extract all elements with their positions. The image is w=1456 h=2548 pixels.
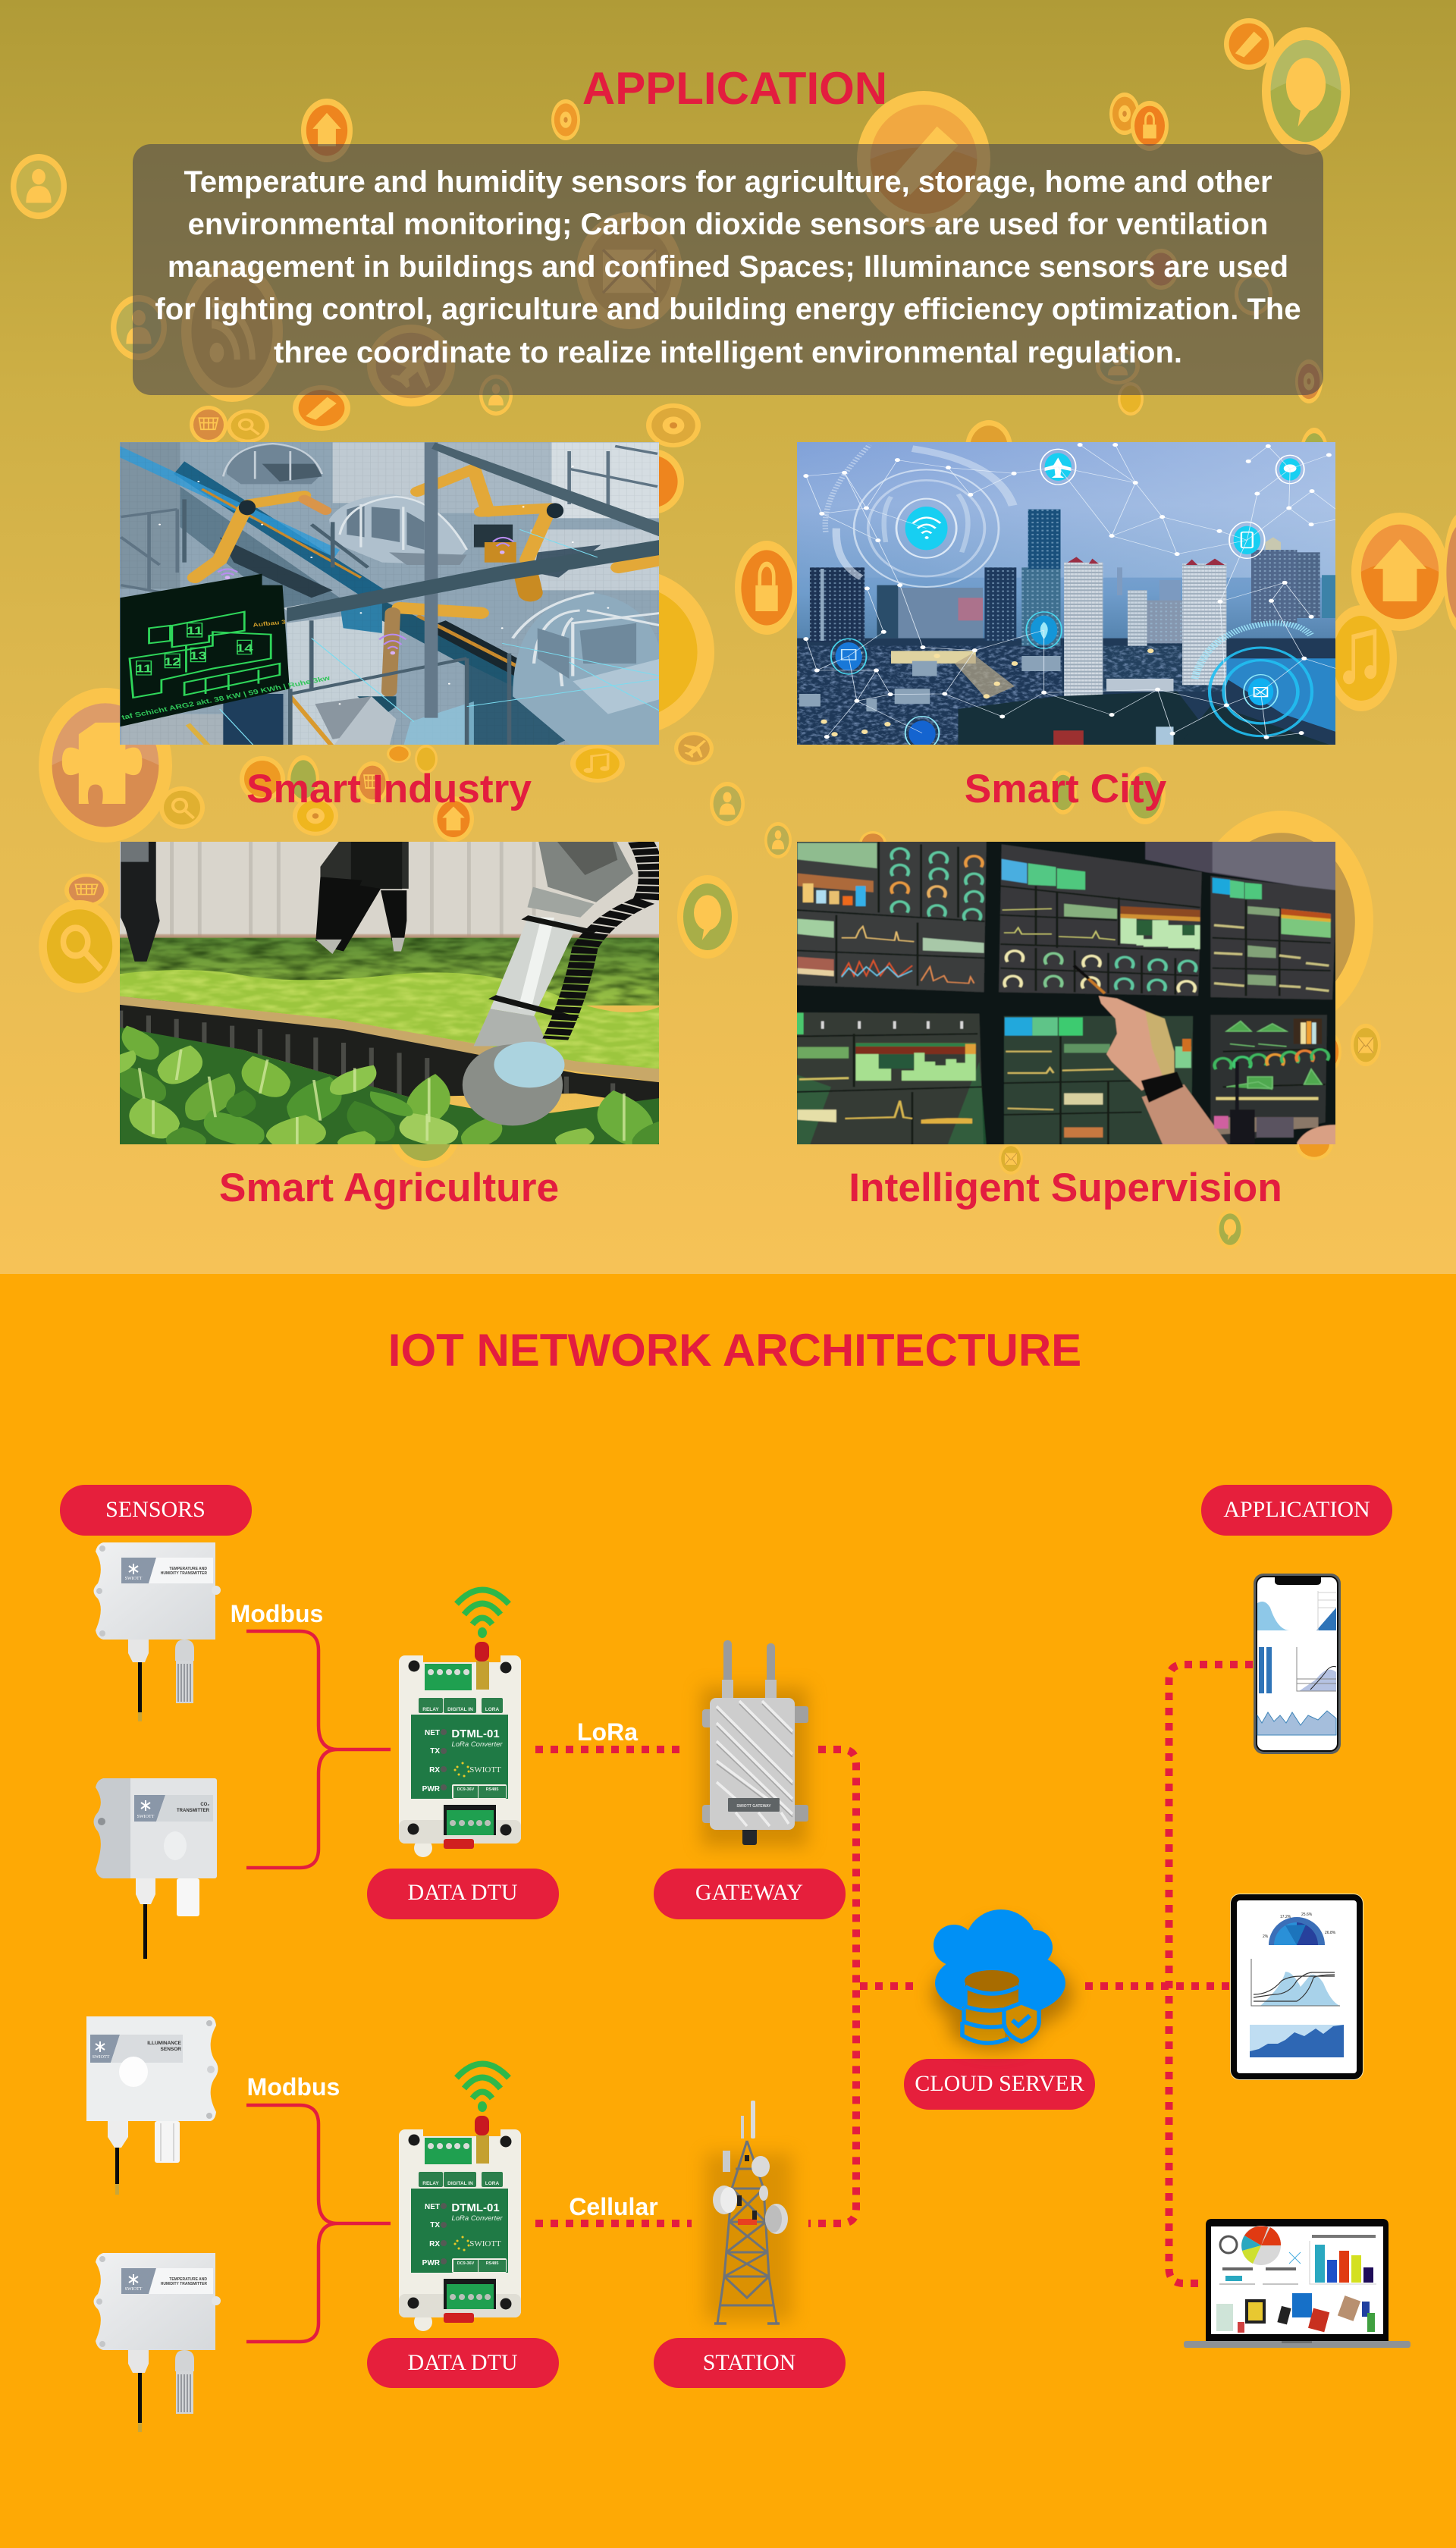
device: tablet dashboard: 26.8% bbox=[1325, 1931, 1336, 1935]
device: DTML-01 DTU top: PWR bbox=[422, 1785, 441, 1793]
device: DTML-01 DTU bottom: RELAY bbox=[422, 2181, 439, 2186]
sensor: temperature and humidity top: TEMPERATURE AND bbox=[169, 1567, 207, 1571]
device: DTML-01 DTU bottom: LORA bbox=[485, 2181, 500, 2186]
device: laptop dashboard bbox=[1184, 2219, 1410, 2348]
sensor: illuminance: ILLUMINANCE bbox=[147, 2041, 182, 2046]
photo: intelligent supervision monitors bbox=[789, 834, 1342, 1149]
device: DTML-01 DTU bottom: DC9-36V bbox=[457, 2261, 475, 2266]
sensor: temperature and humidity bottom: TEMPERATURE AND bbox=[169, 2277, 207, 2282]
label: Smart City: Smart City bbox=[965, 767, 1167, 811]
device: DTML-01 DTU bottom: DTML-01 bbox=[451, 2201, 500, 2214]
photo: smart city network bbox=[789, 436, 1342, 751]
label pill: CLOUD SERVER bbox=[904, 2059, 1095, 2110]
device: DTML-01 DTU top: RX bbox=[429, 1766, 440, 1774]
arrow: gateway and station to cloud bbox=[808, 1749, 913, 2223]
label pill: STATION: STATION bbox=[703, 2350, 795, 2375]
text block: description: Temperature and humidity sensors for agriculture, storage, home and other bbox=[184, 165, 1272, 199]
text block: description: three coordinate to realize intelligent environmental regulation. bbox=[274, 336, 1182, 369]
icon: wifi top bbox=[457, 1589, 509, 1638]
text block: description: environmental monitoring; Carbon dioxide sensors are used for ventilation bbox=[188, 208, 1268, 241]
device: DTML-01 DTU top: SWIOTT bbox=[469, 1765, 501, 1774]
text block: description: management in buildings and confined Spaces; Illuminance sensors are used bbox=[168, 250, 1288, 284]
photo: smart industry factory: taf Schicht ARG2 akt. 38 KW | 59 KWh | Ruhe 3kw bbox=[121, 674, 332, 721]
label pill: SENSORS: SENSORS bbox=[105, 1497, 206, 1522]
device: DTML-01 DTU top: LoRa Converter bbox=[451, 1740, 503, 1749]
label: Smart Industry: Smart Industry bbox=[246, 767, 532, 811]
protocol label: Cellular: Cellular bbox=[569, 2193, 658, 2220]
sensor: CO2 transmitter: SWIOTT bbox=[137, 1815, 155, 1819]
photo: smart industry factory: 14 bbox=[236, 642, 253, 654]
arrow: cloud to applications bbox=[1085, 1665, 1253, 2283]
label pill: APPLICATION: APPLICATION bbox=[1223, 1497, 1370, 1522]
title: IOT NETWORK ARCHITECTURE: IOT NETWORK ARCHITECTURE bbox=[388, 1325, 1081, 1376]
device: DTML-01 DTU bottom: TX bbox=[430, 2221, 440, 2230]
device: DTML-01 DTU bottom: DIGITAL IN bbox=[447, 2181, 473, 2186]
device: DTML-01 DTU bottom bbox=[399, 2116, 521, 2331]
label pill: DATA DTU bottom bbox=[367, 2338, 559, 2388]
background: architecture section bbox=[0, 1274, 1456, 2548]
photo: smart industry factory: Aufbau 3 bbox=[253, 619, 287, 628]
device: DTML-01 DTU bottom: RS485 bbox=[486, 2261, 498, 2266]
label pill: STATION bbox=[654, 2338, 846, 2388]
sensor: illuminance bbox=[86, 2016, 218, 2195]
device: DTML-01 DTU top: NET bbox=[425, 1729, 440, 1737]
photo: smart industry factory: 11 bbox=[136, 662, 152, 675]
photo: smart industry factory: 12 bbox=[164, 655, 181, 668]
device: tablet dashboard: 17.2% bbox=[1280, 1915, 1291, 1919]
label: Intelligent Supervision: Intelligent Supervision bbox=[849, 1166, 1282, 1210]
text block: description: for lighting control, agriculture and building energy efficiency optimization. The bbox=[155, 293, 1301, 326]
device: DTML-01 DTU top: DTML-01 bbox=[451, 1727, 500, 1740]
label pill: APPLICATION bbox=[1201, 1485, 1392, 1536]
device: DTML-01 DTU top bbox=[399, 1642, 521, 1857]
device: tablet dashboard bbox=[1230, 1894, 1363, 2080]
connector: Modbus bracket top bbox=[246, 1631, 391, 1868]
device: DTML-01 DTU top: DC9-36V bbox=[457, 1787, 475, 1792]
sensor: temperature and humidity top: HUMIDITY TRANSMITTER bbox=[161, 1571, 207, 1576]
label: Smart Agriculture: Smart Agriculture bbox=[219, 1166, 559, 1210]
sensor: illuminance: SWIOTT bbox=[93, 2055, 110, 2060]
label pill: DATA DTU top bbox=[367, 1869, 559, 1919]
icon: wifi bottom bbox=[457, 2064, 509, 2112]
photo: smart industry factory bbox=[114, 436, 667, 751]
label pill: CLOUD SERVER: CLOUD SERVER bbox=[915, 2071, 1084, 2096]
device: DTML-01 DTU top: DIGITAL IN bbox=[447, 1707, 473, 1712]
device: DTML-01 DTU bottom: RX bbox=[429, 2240, 440, 2248]
label pill: DATA DTU top: DATA DTU bbox=[407, 1880, 518, 1905]
photo: smart industry factory: 11 bbox=[187, 624, 203, 637]
label pill: GATEWAY: GATEWAY bbox=[695, 1880, 803, 1905]
device: DTML-01 DTU top: RS485 bbox=[486, 1787, 498, 1792]
sensor: CO2 transmitter bbox=[94, 1778, 217, 1959]
protocol label: Modbus top: Modbus bbox=[231, 1600, 323, 1627]
sensor: temperature and humidity bottom: SWIOTT bbox=[125, 2287, 143, 2292]
sensor: illuminance: SENSOR bbox=[161, 2047, 181, 2052]
device: LoRa gateway: SWIOTT GATEWAY bbox=[736, 1804, 771, 1809]
protocol label: Modbus bottom: Modbus bbox=[247, 2073, 340, 2101]
device: DTML-01 DTU bottom: LoRa Converter bbox=[451, 2214, 503, 2223]
protocol label: LoRa: LoRa bbox=[577, 1718, 638, 1746]
label pill: DATA DTU bottom: DATA DTU bbox=[407, 2350, 518, 2375]
background: application section bbox=[0, 0, 1456, 1274]
icon: cloud server database bbox=[933, 1909, 1072, 2050]
sensor: CO2 transmitter: CO₂ bbox=[200, 1803, 209, 1807]
photo: smart industry factory: 13 bbox=[190, 649, 207, 662]
label pill: SENSORS bbox=[60, 1485, 252, 1536]
sensor: temperature and humidity top: SWIOTT bbox=[125, 1577, 143, 1581]
device: DTML-01 DTU top: RELAY bbox=[422, 1707, 439, 1712]
connector: Modbus bracket bottom bbox=[246, 2105, 391, 2342]
device: LoRa gateway bbox=[701, 1640, 808, 1847]
label pill: GATEWAY bbox=[654, 1869, 846, 1919]
device: tablet dashboard: 25.6% bbox=[1301, 1913, 1313, 1917]
photo: smart agriculture robot bbox=[120, 842, 659, 1144]
device: DTML-01 DTU top: LORA bbox=[485, 1707, 500, 1712]
device: tablet dashboard: 2% bbox=[1263, 1935, 1269, 1939]
panel: application description bbox=[133, 144, 1323, 395]
sensor: temperature and humidity bottom: HUMIDITY TRANSMITTER bbox=[161, 2282, 207, 2286]
device: DTML-01 DTU bottom: SWIOTT bbox=[469, 2239, 501, 2248]
device: DTML-01 DTU bottom: PWR bbox=[422, 2259, 441, 2267]
arrow: Cellular dotted link bbox=[535, 2220, 692, 2227]
sensor: temperature and humidity bottom bbox=[94, 2253, 221, 2432]
sensor: temperature and humidity top bbox=[94, 1542, 221, 1721]
decorative floating app icon bubbles bbox=[11, 18, 1456, 1249]
device: cellular tower bbox=[705, 2101, 792, 2324]
device: DTML-01 DTU bottom: NET bbox=[425, 2203, 440, 2211]
title: APPLICATION: APPLICATION bbox=[582, 63, 887, 114]
device: DTML-01 DTU top: TX bbox=[430, 1747, 440, 1756]
device: phone dashboard bbox=[1254, 1574, 1341, 1754]
sensor: CO2 transmitter: TRANSMITTER bbox=[177, 1809, 210, 1813]
arrow: LoRa dotted link bbox=[535, 1746, 679, 1753]
